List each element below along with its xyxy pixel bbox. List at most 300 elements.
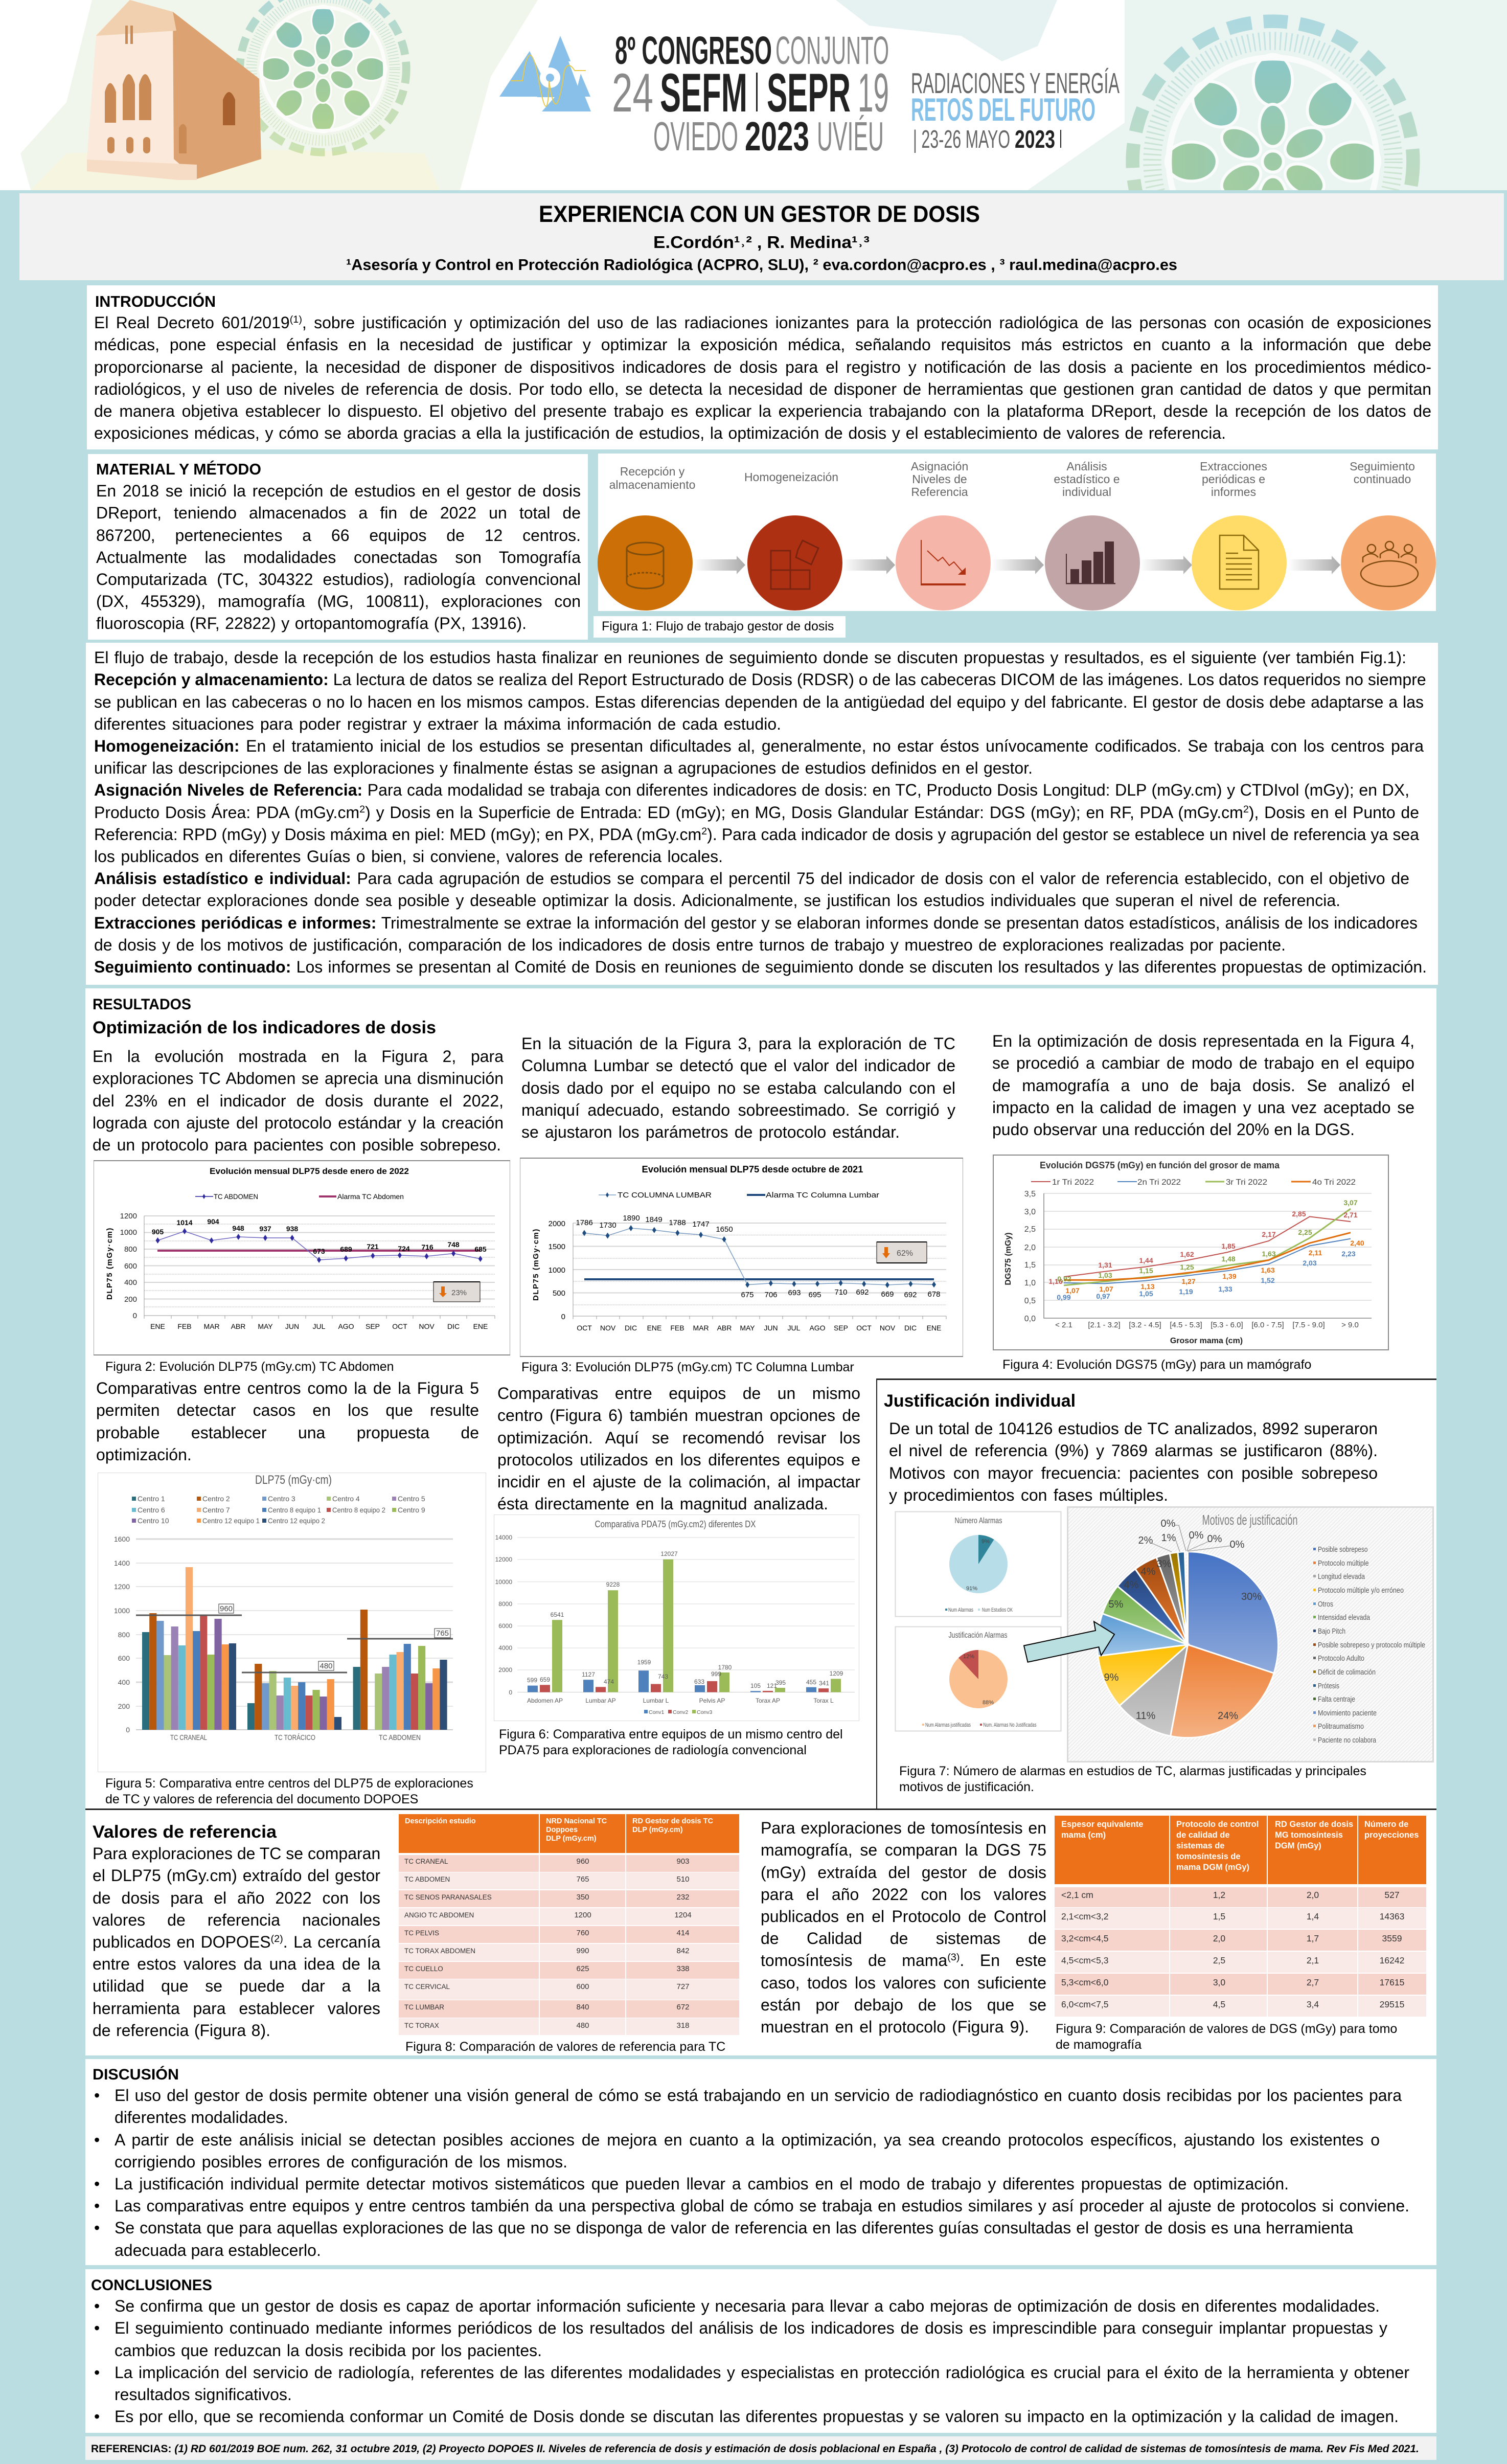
panel: material y método [88,454,588,640]
caption: figure 6 [499,1727,826,1758]
congress wordmark: 24 [612,62,653,123]
caption: figure 9 [1056,2021,1372,2053]
text: justificación individual: el nivel de referencia (9%) y 7869 alarmas se justificaron (88%). [889,1441,1378,1460]
figure 2: line chart TC abdomen: 937 [259,1225,271,1233]
text: figure 4 commentary: pudo observar una reducción del 20% en la DGS. [992,1120,1355,1139]
step labels: Niveles de [912,472,967,486]
authors: E.Cordón¹˒² , R. Medina¹˒³ [653,233,870,252]
figure 6: bar chart comparison between equipment: 1209 [830,1670,843,1677]
table: figure 9: 2,1<cm<3,2 [1061,1911,1108,1922]
figure 3: line chart TC columna lumbar: FEB [670,1324,684,1332]
figure 4: line chart DGS75 by breast thickness: 1,5 [1024,1261,1036,1270]
legend: Centro 12 equipo 2 [268,1517,325,1525]
legend: motivos [1313,1545,1425,1745]
text: figure 2 commentary [93,1047,504,1154]
text: valores de referencia TC: entre estos valores da una idea de la [93,1955,380,1973]
text: figure 6 commentary [497,1383,860,1515]
step circle: meeting [1341,515,1436,611]
figure 4: line chart DGS75 by breast thickness: 1,33 [1218,1285,1232,1293]
figure 4: line chart DGS75 by breast thickness: 1,0 [1024,1279,1036,1287]
legend: Centro 7 [202,1506,230,1514]
text: justificación individual: y procedimientos con fases múltiples. [889,1486,1168,1504]
text: valores de referencia mamografía: de Calidad de sistemas de [761,1929,1046,1948]
text: figure 5 commentary: probable establecer una propuesta de [96,1423,479,1442]
figure 4: line chart DGS75 by breast thickness: 3,07 [1343,1199,1358,1207]
table: figure 8: 765 [576,1875,589,1884]
step circle: bar chart [1045,515,1140,611]
legend: motivos: Paciente no colabora [1318,1736,1377,1745]
text: valores de referencia mamografía: (mGy) extraída del gestor de dosis [761,1863,1046,1882]
legend: motivos: Intensidad elevada [1318,1613,1371,1622]
figure 4: line chart DGS75 by breast thickness: 1,44 [1139,1256,1153,1264]
table: figure 8: ANGIO TC ABDOMEN [404,1911,474,1919]
panel: conclusiones: • [94,2363,100,2382]
figure 1: workflow diagram [598,454,1436,611]
figure 4: line chart DGS75 by breast thickness: 1r Tri 2022 [1052,1178,1094,1187]
figure 6: bar chart comparison between equipment: 9228 [606,1581,620,1588]
figure 3: line chart TC columna lumbar: 2000 [549,1219,565,1228]
affiliation: ¹Asesoría y Control en Protección Radiológica (ACPRO, SLU), ² eva.cordon@acpro.es , ³ raul.medina@acpro.es [346,256,1177,274]
table: figure 9: 3,0 [1213,1977,1225,1987]
figure 2: line chart TC abdomen: 400 [124,1278,137,1287]
group: TC abdomen [353,1610,447,1730]
text: valores de referencia mamografía: tomosíntesis de mama(3). En este [761,1951,1046,1970]
figure 6: bar chart comparison between equipment: 2000 [498,1666,512,1674]
figure 6: bar chart comparison between equipment: 395 [775,1679,786,1686]
table: figure 8: TC CRANEAL [404,1858,448,1865]
table: figure 8: NRD Nacional TC [546,1817,607,1825]
body text: material y método: (DX, 455329), mamografía (MG, 100811), exploraciones con [96,592,581,611]
workflow text: Seguimiento continuado: Los informes se presentan al Comité de Dosis en reuniones de seguimiento donde se discuten los resultados y las diferentes propuestas de optimización. [94,958,1427,976]
table: figure 8: 625 [576,1964,589,1973]
figure 6: bar chart comparison between equipment: 14000 [495,1534,512,1541]
body text: material y método: fluoroscopia (RF, 22822) y ortopantomografía (PX, 13916). [96,614,527,632]
figure 2: line chart TC abdomen: 1014 [176,1218,193,1227]
table: figure 9: sistemas de [1176,1841,1224,1850]
discussion bullet list: El uso del gestor de dosis permite obtener una visión general de cómo se está trabajando en un servicio de radiodiagnóstico en cuanto dosis recibidas por los pacientes para [115,2086,1402,2105]
figure 4: line chart DGS75 by breast thickness: 1,63 [1262,1250,1276,1258]
panel: workflow description [86,643,1438,985]
table: figure 8: 414 [676,1929,690,1937]
figure 2: line chart TC abdomen: FEB [177,1322,192,1330]
text: valores de referencia TC: de referencia (Figura 8). [93,2021,270,2040]
figure 4: line chart DGS75 by breast thickness: 1,13 [1140,1282,1155,1291]
table: figure 8: TC TORAX [404,2022,439,2029]
figure 2: line chart TC abdomen: SEP [366,1322,380,1330]
body text: introducción [94,313,1431,442]
body text: introducción: El Real Decreto 601/2019(1), sobre justificación y optimización del uso de las radiaciones ionizantes para la protección radiológica de las personas con ocasión de exposiciones [94,313,1431,332]
pie chart: motivos de justificación: 5% [1109,1599,1124,1610]
figure 5: bar chart comparison between centres: 800 [118,1631,130,1639]
legend: Centro 9 [398,1506,425,1514]
congress wordmark: CONJUNTO [775,29,889,73]
table: figure 8: RD Gestor de dosis TC [632,1817,713,1825]
figure 6: bar chart comparison between equipment: Lumbar AP [585,1697,616,1704]
heading: valores de referencia: Valores de referencia [93,1822,277,1842]
caption: figure 5: Figura 5: Comparativa entre centros del DLP75 de exploraciones [105,1776,473,1791]
legend: motivos: Posible sobrepeso y protocolo múltiple [1318,1641,1425,1649]
table: figure 8: 350 [576,1893,589,1902]
reference levels: 480 [319,1662,333,1670]
figure 3: line chart TC columna lumbar: 1500 [549,1242,565,1251]
figure 6: bar chart comparison between equipment: Torax AP [756,1697,780,1704]
figure 3: line chart TC columna lumbar: 669 [881,1290,894,1299]
figure 2: line chart TC abdomen: 721 [367,1242,379,1251]
text: figure 2 commentary: En la evolución mostrada en la Figura 2, para [93,1047,504,1066]
figure 2: line chart TC abdomen [94,1160,510,1355]
pie chart: motivos de justificación: 24% [1218,1710,1238,1722]
congress wordmark: RETOS DEL FUTURO [911,92,1095,128]
pie chart: motivos de justificación: 0% [1161,1518,1176,1529]
table: figure 8: 672 [676,2003,690,2011]
figure 4: line chart DGS75 by breast thickness: 0,5 [1024,1297,1036,1305]
table: figure 8: TC ABDOMEN [404,1875,450,1883]
figure 6: bar chart comparison between equipment: 12027 [660,1550,678,1557]
pie chart: justificación alarmas [895,1626,1061,1731]
figure 4: line chart DGS75 by breast thickness: 2,5 [1024,1225,1036,1234]
text: figure 3 commentary: maniquí adecuado, estando sobreestimado. Se corrigió y [521,1101,955,1119]
figure 4: line chart DGS75 by breast thickness: 1,52 [1261,1276,1275,1284]
figure 4: line chart DGS75 by breast thickness: 2,23 [1341,1250,1356,1258]
figure 2: line chart TC abdomen: 1000 [120,1228,137,1237]
panel: discusión: • [94,2219,100,2237]
figure 6: bar chart comparison between equipment: 121 [767,1682,777,1689]
figure 4: line chart DGS75 by breast thickness: [5.3 - 6.0] [1211,1321,1243,1329]
figure 4: line chart DGS75 by breast thickness: 2,0 [1024,1244,1036,1252]
text: figure 2 commentary: del 23% en el indicador de dosis durante el 2022, [93,1092,504,1110]
workflow text: Referencia: RPD (mGy) y Dosis máxima en piel: MED (mGy); en PX, PDA (mGy.cm2). Para cada indicador de dosis y agrupación del gestor se establece un nivel de referencia ya sea [94,825,1419,844]
body text: introducción: médicas, pone especial énfasis en la necesidad de justificar y optimizar la exposición médica, señalando requisitos más estrictos en cuanto a la información que debe [94,335,1431,354]
figure 2: line chart TC abdomen: 1200 [120,1212,137,1220]
figure 2: line chart TC abdomen: 724 [398,1245,410,1253]
table: figure 8: 338 [676,1964,690,1973]
step labels: Seguimiento [1350,460,1415,473]
text: figure 4 commentary [992,1032,1414,1139]
figure 2: line chart TC abdomen: 600 [124,1262,137,1271]
pie chart: número de alarmas: Num Alarmas [948,1607,973,1613]
figure 4: line chart DGS75 by breast thickness: 2,25 [1298,1228,1312,1236]
figure 2: line chart TC abdomen: 904 [207,1217,219,1226]
table: figure 8: 727 [676,1982,690,1991]
figure 6: bar chart comparison between equipment: 633 [694,1678,704,1685]
table: figure 8: 318 [676,2021,690,2030]
table: figure 9: <2,1 cm [1061,1890,1093,1900]
legend: motivos: Posible sobrepeso [1318,1545,1368,1554]
pie chart: motivos de justificación: 3% [1157,1558,1172,1570]
figure 4: line chart DGS75 by breast thickness: 1,62 [1180,1250,1194,1258]
step labels: Extracciones [1200,460,1267,473]
pie chart: motivos de justificación: 4% [1141,1566,1156,1577]
figure 6: bar chart comparison between equipment: 0 [509,1689,512,1696]
figure 4: line chart DGS75 by breast thickness: 2,71 [1343,1211,1358,1219]
legend: Centro 10 [138,1517,169,1525]
figure 4: line chart DGS75 by breast thickness: 3r Tri 2022 [1226,1178,1267,1187]
figure 5: bar chart comparison between centres: 1600 [114,1535,130,1543]
figure 3: line chart TC columna lumbar: 1786 [576,1218,593,1227]
figure 2: line chart TC abdomen: 200 [124,1295,137,1304]
figure 4: line chart DGS75 by breast thickness: 0,92 [1057,1275,1071,1283]
figure 6: bar chart comparison between equipment: 10000 [495,1578,512,1586]
body text: material y método: En 2018 se inició la recepción de estudios en el gestor de dosis [96,482,581,500]
figure 2: line chart TC abdomen: NOV [419,1322,435,1330]
figure 6: bar chart comparison between equipment: 1780 [718,1664,732,1671]
figure 6: bar chart comparison between equipment: 341 [819,1680,829,1687]
legend: motivos: Longitud elevada [1318,1572,1365,1581]
figure 2: line chart TC abdomen: 673 [313,1247,325,1255]
congress wordmark: 2023 [1015,126,1055,153]
text: valores de referencia TC: valores de referencia nacionales [93,1911,380,1929]
figure 3: line chart TC columna lumbar: ENE [927,1324,941,1332]
caption: figure 7 [899,1764,1340,1795]
pie chart: número de alarmas: Número Alarmas [955,1517,1002,1525]
step circle: document [1192,515,1287,611]
table: figure 8: TC TORAX ABDOMEN [404,1947,475,1955]
congress wordmark: 8º CONGRESO [615,29,772,73]
panel: discusión: • [94,2086,100,2105]
figure 6: bar chart comparison between equipment: 599 [527,1677,537,1684]
text: figure 2 commentary: exploraciones TC Abdomen se aprecia una disminución [93,1069,504,1088]
header banner: congress artwork and logo [0,0,1507,190]
pie chart: motivos de justificación: 0% [1207,1533,1222,1545]
figure 4: line chart DGS75 by breast thickness: 1,31 [1098,1261,1112,1269]
step circle: storage cylinder [598,515,693,611]
text: valores de referencia mamografía: muestran en el protocolo (Figura 9). [761,2018,1029,2036]
figure 3: line chart TC columna lumbar: DLP75 (mGy·cm) [532,1228,540,1301]
figure 6: bar chart comparison between equipment [494,1514,859,1721]
conclusions bullet list: Se confirma que un gestor de dosis es capaz de aportar información suficiente y necesaria para llevar a cabo mejoras de optimización de dosis en diferentes modalidades. [115,2297,1380,2315]
text: figure 4 commentary: En la optimización de dosis representada en la Figura 4, [992,1032,1414,1050]
logo triangles [499,36,591,111]
workflow text: Homogeneización: En el tratamiento inicial de los estudios se presentan dificultades al, generalmente, no estar éstos unívocamente codificados. Se trabaja con los centros para [94,737,1424,755]
conclusions bullet list: cambios que reduzcan la dosis recibida por los pacientes. [115,2341,542,2360]
badge: 62 percent reduction: 62% [897,1249,913,1258]
figure 3: line chart TC columna lumbar: 1747 [692,1220,710,1229]
figure 6: bar chart comparison between equipment: Abdomen AP [527,1697,563,1704]
figure 4: line chart DGS75 by breast thickness: 3,0 [1024,1208,1036,1216]
legend: motivos: Protocolo múltiple [1318,1559,1369,1568]
figure 4: line chart DGS75 by breast thickness: 1,15 [1139,1267,1153,1275]
references bar [85,2436,1436,2460]
table: figure 8: Descripción estudio [405,1817,476,1825]
pie chart: motivos de justificación: 0% [1230,1539,1245,1550]
figure 3: line chart TC columna lumbar: OCT [577,1324,592,1332]
step labels: Recepción y [620,465,685,478]
figure 6: bar chart comparison between equipment: Conv3 [697,1709,713,1715]
step labels: continuado [1354,472,1411,486]
step labels: informes [1211,485,1256,499]
figure 6: bar chart comparison between equipment: 4000 [498,1644,512,1652]
text: figure 4 commentary: de mamografía a uno de baja dosis. Se analizó el [992,1076,1414,1095]
figure 2: line chart TC abdomen: MAY [258,1322,273,1330]
figure 2: line chart TC abdomen: 905 [152,1228,164,1236]
workflow text: de dosis y de los motivos de justificación, comparación de los indicadores de dosis entre turnos de trabajo y muestreo de exploraciones realizadas por paciente. [94,936,1286,954]
text: figure 2 commentary: de un protocolo para pacientes con posible sobrepeso. [93,1136,501,1154]
caption: figure 7: Figura 7: Número de alarmas en estudios de TC, alarmas justificadas y principales [899,1764,1366,1778]
step labels: periódicas e [1202,472,1265,486]
figure 3: line chart TC columna lumbar: 678 [927,1290,941,1299]
figure 4: line chart DGS75 by breast thickness: 1,39 [1222,1272,1237,1280]
panel: conclusiones [85,2269,1436,2433]
figure 4: line chart DGS75 by breast thickness: Evolución DGS75 (mGy) en función del grosor de mama [1040,1160,1280,1170]
figure 4: line chart DGS75 by breast thickness: 2,17 [1262,1230,1276,1238]
figure 3: line chart TC columna lumbar: 710 [834,1288,848,1297]
legend: motivos: Déficit de colimación [1318,1668,1376,1677]
table: figure 9: mama DGM (mGy) [1176,1863,1249,1872]
conclusions bullet list: El seguimiento continuado mediante informes periódicos de los resultados del análisis de los indicadores de dosis es imprescindible para conseguir implantar propuestas y [115,2319,1387,2337]
figure 5: bar chart comparison between centres: 600 [118,1654,130,1662]
discussion bullet list: diferentes modalidades. [115,2108,288,2127]
discussion bullet list: La justificación individual permite detectar motivos sistemáticos que pueden llevar a cambios en el modo de trabajo y diferentes propuestas de optimización. [115,2175,1289,2193]
figure 3: line chart TC columna lumbar: 1890 [623,1214,640,1223]
church [87,0,261,180]
figure 3: line chart TC columna lumbar: 1730 [599,1221,616,1230]
table: figure 8: Doppoes [546,1826,578,1834]
text: valores de referencia TC: de dosis para el año 2022 con los [93,1889,380,1907]
figure 4: line chart DGS75 by breast thickness: 2n Tri 2022 [1137,1178,1181,1187]
figure 3: line chart TC columna lumbar: 695 [808,1291,821,1299]
table: figure 9: 2,1 [1307,1955,1319,1965]
figure 4: line chart DGS75 by breast thickness: 1,27 [1181,1277,1196,1285]
figure 5: bar chart comparison between centres [98,1473,486,1772]
figure 2: line chart TC abdomen: 716 [421,1243,433,1251]
panel: valores de referencia [85,1810,1436,2055]
pie chart: motivos de justificación: 1% [1161,1532,1176,1544]
figure 5: bar chart comparison between centres: 0 [126,1726,130,1734]
legend: Centro 5 [398,1495,425,1503]
figure 6: bar chart comparison between equipment: 743 [658,1673,668,1680]
step labels: Asignación [911,460,968,473]
table: figure 9: 5,3<cm<6,0 [1061,1977,1109,1987]
workflow text: Análisis estadístico e individual: Para cada agrupación de estudios se compara el percentil 75 del indicador de dosis con el valor de referencia establecido, con el objetivo de [94,869,1409,888]
text: figure 3 commentary: dosis dado por el equipo no se estaba calculando con el [521,1079,955,1097]
figure 2: line chart TC abdomen: JUN [285,1322,299,1330]
title: EXPERIENCIA CON UN GESTOR DE DOSIS [539,201,980,227]
workflow text: poder detectar exploraciones donde sea posible y deseable optimizar la dosis. Adicionalmente, se justifican los estudios individuales que superan el nivel de referencia. [94,891,1340,910]
table: figure 8: TC LUMBAR [404,2003,444,2011]
workflow text: Recepción y almacenamiento: La lectura de datos se realiza del Report Estructurado de Dosis (RDSR) o de las cabeceras DICOM de las imágenes. Los datos requeridos no siempre [94,670,1426,689]
figure 3: line chart TC columna lumbar: JUL [788,1324,801,1332]
figure 5: bar chart comparison between centres: 1000 [114,1607,130,1615]
group: TC torácico [247,1664,341,1730]
text: figure 5 commentary [96,1377,479,1466]
table: figure 9: Número de [1364,1820,1408,1829]
figure 3: line chart TC columna lumbar: ENE [647,1324,661,1332]
right rosette [1133,21,1413,302]
text: figure 4 commentary: impacto en la calidad de imagen y una vez aceptado se [992,1098,1414,1117]
figure 2: line chart TC abdomen: ENE [473,1322,488,1330]
conclusions bullet list [115,2295,1431,2428]
figure 6: bar chart comparison between equipment: 6000 [498,1622,512,1630]
figure 4: line chart DGS75 by breast thickness: [3.2 - 4.5] [1129,1321,1161,1329]
pie chart: número de alarmas: 9% [981,1539,990,1545]
pie chart: motivos de justificación: 0% [1189,1530,1204,1541]
table: figure 9: 4,5<cm<5,3 [1061,1955,1108,1965]
heading: conclusiones: CONCLUSIONES [91,2277,212,2294]
table: figure 9: 2,0 [1307,1890,1319,1900]
caption: figure 5 [105,1776,450,1807]
table: figure 8: 600 [576,1982,589,1991]
discussion bullet list: corrigiendo posibles errores de configuración de los mismos. [115,2153,567,2171]
figure 6: bar chart comparison between equipment: Conv2 [673,1709,689,1715]
pie chart: número de alarmas: Num Estudios OK [982,1607,1013,1613]
conclusions bullet list: La implicación del servicio de radiología, referentes de las diferentes modalidades y especialistas en protección radiológica es crucial para el éxito de la herramienta y obtener [115,2363,1409,2382]
workflow text: Extracciones periódicas e informes: Trimestralmente se extrae la información del gestor y se elaboran informes donde se presentan datos estadísticos, análisis de los indicadores [94,914,1418,932]
text: valores de referencia TC: herramienta para establecer valores [93,1999,380,2018]
heading: justificación individual: Justificación individual [884,1391,1076,1411]
figure 1 caption: Figura 1: Flujo de trabajo gestor de dosis [602,619,834,634]
congress wordmark [612,29,1120,159]
text: figure 3 commentary: Columna Lumbar se detectó que el valor del indicador de [521,1056,955,1075]
table: figure 8: 480 [576,2021,589,2030]
table: figure 9: Protocolo de control [1176,1820,1259,1829]
panel: discusión [85,2059,1436,2265]
figure 2: line chart TC abdomen: JUL [313,1322,326,1330]
table: figure 9: 1,7 [1307,1933,1319,1943]
figure 3: line chart TC columna lumbar: 692 [904,1291,917,1299]
figure 3: line chart TC columna lumbar: NOV [600,1324,616,1332]
congress wordmark: RADIACIONES Y ENERGÍA [911,67,1120,100]
figure 4: line chart DGS75 by breast thickness: 1,85 [1221,1242,1236,1250]
table: figure 9: 16242 [1380,1955,1404,1965]
figure 4: line chart DGS75 by breast thickness: [6.0 - 7.5] [1251,1321,1284,1329]
figure 2: line chart TC abdomen: Alarma TC Abdomen [337,1192,404,1201]
figure 5: bar chart comparison between centres: 1200 [114,1583,130,1591]
text: figure 6 commentary: incidir en el ajuste de la colimación, al impactar [497,1473,860,1491]
figure 4: line chart DGS75 by breast thickness: > 9.0 [1341,1321,1359,1329]
text: valores de referencia mamografía: están por debajo de los que se [761,1996,1046,2014]
panel: discusión: • [94,2175,100,2193]
discussion bullet list [115,2085,1431,2262]
figure 6: bar chart comparison between equipment: Comparativa PDA75 (mGy.cm2) diferentes DX [595,1519,756,1529]
text: valores de referencia mamografía: publicados en el Protocolo de Control [761,1907,1046,1926]
pie chart: número de alarmas: 91% [966,1586,977,1592]
figure 6: bar chart comparison between equipment: Conv1 [649,1709,665,1715]
figure 6: bar chart comparison between equipment: 12000 [495,1556,512,1563]
caption: figure 6: Figura 6: Comparativa entre equipos de un mismo centro del [499,1727,843,1742]
figure 2: line chart TC abdomen: 800 [124,1245,137,1254]
text: figure 5 commentary: optimización. [96,1445,192,1464]
workflow text: unificar las descripciones de las exploraciones y finalmente éstas se asignan a agrupaciones de estudios definidos en el gestor. [94,759,1033,777]
table: figure 9: 17615 [1380,1977,1404,1987]
figure 6: bar chart comparison between equipment: 8000 [498,1600,512,1608]
table: figure 8: TC CERVICAL [404,1983,450,1991]
legend: Centro 2 [202,1495,230,1503]
heading: material y método: MATERIAL Y MÉTODO [96,460,261,478]
conclusions bullet list: resultados significativos. [115,2385,292,2404]
figure 6: bar chart comparison between equipment: 1959 [637,1659,651,1666]
reference levels: 960 [220,1604,233,1613]
figure 4: line chart DGS75 by breast thickness: 1,48 [1221,1255,1236,1263]
table: figure 9: 29515 [1380,1999,1404,2009]
figure 4: line chart DGS75 by breast thickness: 1,25 [1180,1263,1194,1271]
discussion bullet list: Las comparativas entre equipos y entre centros también da una perspectiva global de cómo se trabaja en estudios similares y así proceder al ajuste de protocolos si conviene. [115,2197,1409,2215]
figure 4: line chart DGS75 by breast thickness: [4.5 - 5.3] [1170,1321,1202,1329]
pie chart: motivos de justificación [1067,1506,1434,1762]
figure 5: bar chart comparison between centres: 200 [118,1702,130,1710]
figure 4: line chart DGS75 by breast thickness: 2,40 [1350,1239,1364,1247]
pie chart: motivos de justificación: 2% [1138,1535,1153,1546]
table: figure 8: TC CUELLO [404,1965,443,1973]
figure 2: line chart TC abdomen: DLP75 (mGy·cm) [105,1227,114,1300]
figure 3: line chart TC columna lumbar: 1000 [549,1266,565,1275]
heading: resultados: RESULTADOS [93,996,191,1013]
table: figure 9: RD Gestor de dosis [1275,1820,1353,1829]
pie chart: justificación alarmas: 88% [983,1700,994,1706]
left rosette [240,0,406,152]
table: figure 9: MG tomosíntesis [1275,1830,1343,1840]
caption: figure 2: Figura 2: Evolución DLP75 (mGy.cm) TC Abdomen [105,1360,394,1374]
step circle: puzzle [747,515,842,611]
